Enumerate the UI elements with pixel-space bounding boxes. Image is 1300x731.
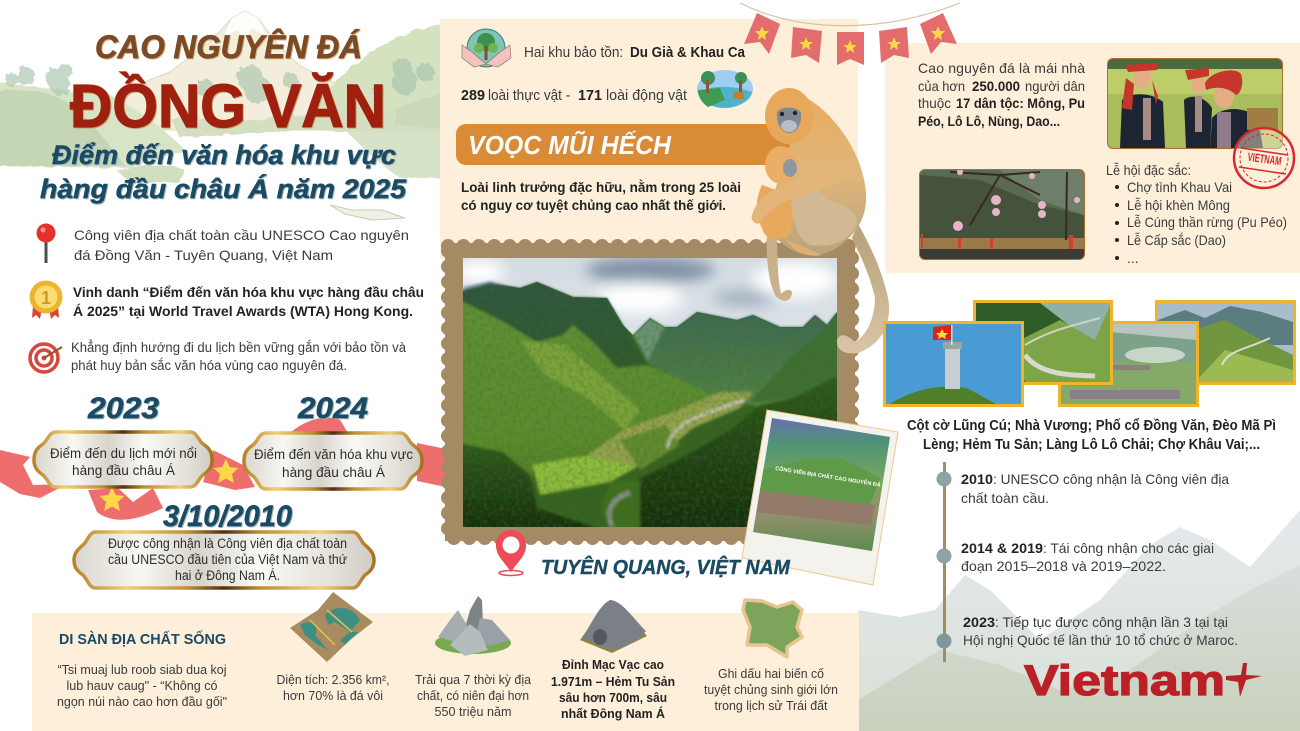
milestone 2023: 2023 <box>963 614 995 630</box>
festivals list: Chợ tình Khau Vai <box>1127 179 1232 195</box>
background: woodblock hills top left <box>0 11 460 220</box>
milestone 2014 and 2019: đoạn 2015–2018 và 2019–2022. <box>961 558 1166 574</box>
attractions caption: Lèng; Hẻm Tu Sản; Làng Lô Lô Chải; Chợ Khâu Vai;... <box>923 437 1260 453</box>
photo: forest texture <box>463 258 837 527</box>
award text: Vinh danh “Điểm đến văn hóa khu vực hàng đầu châu <box>73 284 424 300</box>
icon: mountain with cave <box>580 600 647 653</box>
attractions caption: Cột cờ Lũng Cú; Nhà Vương; Phố cổ Đồng Văn, Đèo Mã Pì <box>907 418 1276 434</box>
festivals list <box>1106 162 1287 266</box>
reserves text: Du Già & Khau Ca <box>630 45 746 61</box>
milestone dots <box>936 472 952 648</box>
festivals list: Lễ Cúng thần rừng (Pu Péo) <box>1127 214 1287 230</box>
pill 2024 <box>244 433 422 489</box>
ethnic groups text: 250.000 <box>972 78 1020 94</box>
stamp <box>1234 128 1294 188</box>
pill 2024: hàng đầu châu Á <box>282 465 385 480</box>
commitment text: Khẳng định hướng đi du lịch bền vững gắn với bảo tồn và <box>71 340 406 355</box>
title line 2: ĐỒNG VĂN <box>70 72 386 140</box>
title <box>40 29 407 204</box>
Mong proverb: lub hauv caug" - “Không có <box>66 678 218 693</box>
photo: village valley <box>1058 321 1199 407</box>
UNESCO timeline <box>936 462 1238 662</box>
milestone 2014 and 2019: : Tái công nhận cho các giai <box>1043 540 1214 556</box>
location text: Công viên địa chất toàn cầu UNESCO Cao nguyên <box>74 227 409 243</box>
Mong proverb: “Tsi muaj lub roob siab dua koj <box>58 662 227 677</box>
species text: 289 <box>461 88 485 104</box>
extinction text: Ghi dấu hai biến cố <box>718 666 824 681</box>
banner: Voọc mũi hếch <box>456 124 790 165</box>
ethnic groups text: Cao nguyên đá là mái nhà <box>918 60 1085 76</box>
photo: ethnic women in red hats <box>1107 58 1283 149</box>
species text: loài thực vật - <box>488 88 574 104</box>
milestone 2023: : Tiếp tục được công nhận lần 3 tại tại <box>995 614 1228 630</box>
ethnic groups text: thuộc <box>918 95 951 111</box>
polaroid photo: CÔNG VIÊN ĐỊA CHẤT CAO NGUYÊN ĐÁ ĐỒNG VĂN <box>775 464 912 494</box>
monkey description: Loài linh trưởng đặc hữu, nằm trong 25 loài <box>461 178 741 195</box>
Mac Vac peak text: 1.971m – Hẻm Tu Sản <box>551 674 675 689</box>
panel: conservation content <box>456 29 790 213</box>
milestone 2023: Hội nghị Quốc tế lần thứ 10 tổ chức ở Maroc. <box>963 632 1238 648</box>
icon: star <box>100 487 124 511</box>
milestone 2010: : UNESCO công nhận là Công viên địa <box>993 471 1229 487</box>
festivals list: ... <box>1127 250 1139 266</box>
species text: loài động vật <box>606 88 687 104</box>
heading: DI SÀN ĐỊA CHẤT SỐNG <box>59 630 226 648</box>
photo: Lung Cu flag tower <box>883 321 1024 407</box>
info rows <box>30 224 424 373</box>
decorative ribbon with stars <box>0 418 446 520</box>
milestone 2010: chất toàn cầu. <box>961 490 1049 506</box>
award text: Á 2025” tại World Travel Awards (WTA) Hong Kong. <box>73 303 413 319</box>
photo: peach blossom festival <box>919 169 1085 260</box>
monkey description: có nguy cơ tuyệt chủng cao nhất thế giới. <box>461 197 726 213</box>
reserves text: Hai khu bảo tồn: <box>524 45 627 61</box>
ethnic groups text: người dân <box>1025 78 1085 94</box>
year 2023: 2023 <box>87 392 159 425</box>
pill 2023: Điểm đến du lịch mới nổi <box>50 446 197 461</box>
ethnic groups text: 17 dân tộc: Mông, Pu <box>956 95 1085 111</box>
festivals list: Lễ hội khèn Mông <box>1127 197 1230 213</box>
photo: mountain road <box>1155 300 1296 385</box>
icon: folded map <box>290 592 373 662</box>
panel: people and festivals <box>885 43 1300 273</box>
pill 2023 <box>34 432 212 487</box>
adult foot <box>786 240 822 256</box>
subtitle line 1: Điểm đến văn hóa khu vực <box>52 140 396 170</box>
area text: Diện tích: 2.356 km², <box>276 672 390 687</box>
geological age text: 550 triệu năm <box>434 704 512 719</box>
icon: target <box>30 344 62 372</box>
Vietnam+ logo: Vietnam <box>1024 657 1225 705</box>
location text: đá Đồng Văn - Tuyên Quang, Việt Nam <box>74 247 333 263</box>
banner: Voọc mũi hếch: VOỌC MŨI HẾCH <box>468 130 672 160</box>
Mac Vac peak text: nhất Đông Nam Á <box>561 706 666 721</box>
background: faded mountains bottom right <box>858 510 1300 731</box>
location name: TUYÊN QUANG, VIỆT NAM <box>541 555 791 579</box>
monkey illustration <box>752 88 889 353</box>
date 3/10/2010: 3/10/2010 <box>163 500 292 533</box>
location heading <box>496 530 791 579</box>
baby body <box>757 185 793 239</box>
adult knee <box>792 187 857 246</box>
main landscape photo with scalloped frame <box>445 243 855 541</box>
title line 1: CAO NGUYÊN ĐÁ <box>95 29 362 65</box>
panel: living geological heritage <box>32 592 859 731</box>
photo strip: attractions <box>883 300 1296 407</box>
extinction text: tuyệt chủng sinh giới lớn <box>704 682 838 697</box>
icon: red location pin <box>496 530 526 576</box>
subtitle line 2: hàng đầu châu Á năm 2025 <box>40 173 407 204</box>
awards timeline <box>34 392 422 588</box>
adult head <box>765 88 813 144</box>
long tail <box>837 224 889 353</box>
polaroid photo <box>742 410 912 585</box>
commitment text: phát huy bản sắc văn hóa vùng cao nguyên đá. <box>71 358 347 373</box>
milestone 2010: 2010 <box>961 471 993 487</box>
pill 2024: Điểm đến văn hóa khu vực <box>254 447 413 462</box>
extinction text: trong lịch sử Trái đất <box>714 698 828 713</box>
photo: winding pass <box>973 300 1113 385</box>
icon: star <box>214 459 238 483</box>
icon: nature conservation logo <box>462 29 511 67</box>
icon: limestone rocks <box>435 596 511 656</box>
icon: wildlife scene <box>697 70 753 108</box>
milestone 2014 and 2019: 2014 & 2019 <box>961 540 1043 556</box>
adult body <box>775 95 866 255</box>
area text: hơn 70% là đá vôi <box>283 688 383 703</box>
ethnic groups text: Péo, Lô Lô, Nùng, Dao... <box>918 113 1060 129</box>
Vietnam+ logo <box>1024 657 1262 705</box>
festivals list: Lễ Cấp sắc (Dao) <box>1127 232 1226 248</box>
festivals list: Lễ hội đặc sắc: <box>1106 162 1191 178</box>
bunting flags <box>740 3 960 65</box>
pill 2023: hàng đầu châu Á <box>72 463 175 478</box>
geological age text: Trải qua 7 thời kỳ địa <box>415 672 532 687</box>
Mac Vac peak text: sâu hơn 700m, sâu <box>559 690 667 705</box>
photo: valley <box>455 257 845 535</box>
ethnic groups text: của hơn <box>918 78 965 94</box>
species text: 171 <box>578 88 602 104</box>
pill 2010 <box>74 532 374 588</box>
icon: map pin <box>36 224 56 263</box>
pill 2010: hai ở Đông Nam Á. <box>175 568 280 583</box>
adult arm <box>752 165 835 224</box>
geological age text: chất, có niên đại hơn <box>417 688 529 703</box>
panel: conservation cream background <box>440 19 858 259</box>
pill 2010: cầu UNESCO đầu tiên của Việt Nam và thứ <box>108 552 347 567</box>
icon: gold medal <box>30 280 62 319</box>
Mong proverb: ngọn núi nào cao hơn đầu gối" <box>57 694 227 709</box>
Mac Vac peak text: Đỉnh Mạc Vạc cao <box>562 657 664 672</box>
icon: Dong Van territory map <box>743 600 802 657</box>
hanging tail <box>767 232 792 301</box>
year 2024: 2024 <box>297 392 368 425</box>
icon: gold medal: 1 <box>41 288 51 308</box>
pill 2010: Được công nhận là Công viên địa chất toàn <box>108 536 347 551</box>
baby head <box>765 146 797 184</box>
